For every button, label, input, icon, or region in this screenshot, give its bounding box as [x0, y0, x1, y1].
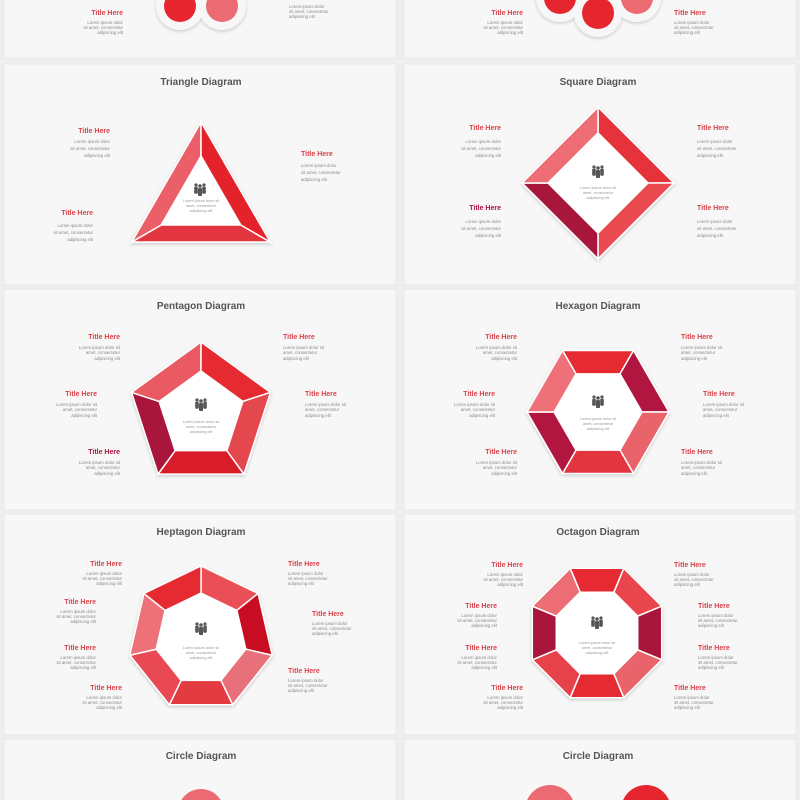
- text blocks: adipiscing elit: [681, 471, 708, 476]
- text blocks: amet, consectetur: [681, 465, 716, 470]
- panel: top-left partial: [4, 0, 396, 58]
- center text: adipiscing elit: [190, 209, 213, 213]
- center text: [580, 417, 617, 431]
- text: right bottom: Lorem ipsum dolor: [697, 219, 733, 224]
- text blocks: sit amet, consectetur: [674, 577, 714, 582]
- text: right: Lorem ipsum dolor: [674, 20, 710, 25]
- text blocks: adipiscing elit: [96, 705, 123, 710]
- text: right: Lorem ipsum dolor: [301, 163, 337, 168]
- text: left top: adipiscing elit: [84, 153, 111, 158]
- center text: [580, 186, 617, 200]
- text: left top: sit amet, consectetur: [70, 146, 111, 151]
- chart: pentagon ring: [132, 342, 270, 474]
- text blocks: amet, consectetur: [461, 407, 496, 412]
- text: left: [483, 10, 524, 35]
- text blocks: Lorem ipsum dolor sit: [56, 402, 98, 407]
- text blocks: adipiscing elit: [94, 356, 121, 361]
- text: right bottom: adipiscing elit: [697, 233, 724, 238]
- text blocks: adipiscing elit: [471, 623, 498, 628]
- text blocks: adipiscing elit: [681, 356, 708, 361]
- text blocks: Title Here: [88, 449, 120, 456]
- center text: amet, consectetur: [186, 204, 217, 208]
- text blocks: Lorem ipsum dolor sit: [681, 345, 723, 350]
- text: top-right body: adipiscing elit: [289, 14, 316, 19]
- text: right top: Title Here: [697, 125, 729, 132]
- text blocks: Lorem ipsum dolor: [698, 613, 734, 618]
- text blocks: Lorem ipsum dolor: [86, 695, 123, 700]
- text blocks: adipiscing elit: [469, 413, 496, 418]
- text: left: Lorem ipsum dolor: [487, 20, 524, 25]
- text blocks: adipiscing elit: [491, 356, 518, 361]
- heading: Circle Diagram: [166, 751, 236, 762]
- icon: people: [592, 395, 604, 408]
- text blocks: Title Here: [681, 334, 713, 341]
- text blocks: adipiscing elit: [70, 619, 97, 624]
- text blocks: adipiscing elit: [497, 582, 524, 587]
- text: left top: adipiscing elit: [475, 153, 502, 158]
- text blocks: Title Here: [674, 685, 706, 692]
- text blocks: Title Here: [90, 685, 122, 692]
- text: top-right body: sit amet, consectetur: [289, 9, 329, 14]
- text blocks: adipiscing elit: [491, 471, 518, 476]
- text blocks: Lorem ipsum dolor: [461, 613, 498, 618]
- text: right top: adipiscing elit: [697, 153, 724, 158]
- text: top-left title: Title Here: [91, 10, 123, 17]
- text blocks: adipiscing elit: [305, 413, 332, 418]
- center text: Lorem ipsum dolor sit: [183, 199, 220, 203]
- text: left top: Lorem ipsum dolor: [74, 139, 111, 144]
- icon: people: [195, 622, 207, 635]
- text blocks: sit amet, consectetur: [457, 618, 498, 623]
- center text: amet, consectetur: [583, 422, 614, 426]
- text blocks: Lorem ipsum dolor: [487, 572, 524, 577]
- text: left: adipiscing elit: [497, 30, 524, 35]
- text blocks: Title Here: [485, 449, 517, 456]
- text blocks: amet, consectetur: [483, 465, 518, 470]
- center text: amet, consectetur: [186, 425, 217, 429]
- text: top-left title: adipiscing elit: [97, 30, 124, 35]
- center text: amet, consectetur: [583, 191, 614, 195]
- panel: circle diagram left: [4, 739, 396, 800]
- text: left bottom: adipiscing elit: [67, 237, 94, 242]
- text blocks: Title Here: [674, 562, 706, 569]
- text: left top: Title Here: [469, 125, 501, 132]
- icon: people: [592, 165, 604, 178]
- text blocks: Lorem ipsum dolor: [288, 678, 324, 683]
- text: left top: [461, 125, 502, 158]
- heading: Circle Diagram: [563, 751, 633, 762]
- text: right top: [697, 125, 737, 158]
- icon: circle: [178, 789, 224, 800]
- heading: Triangle Diagram: [160, 77, 242, 88]
- chart: heptagon ring: [130, 566, 272, 705]
- text blocks: Title Here: [288, 668, 320, 675]
- panel: hexagon: [404, 289, 796, 510]
- text blocks: adipiscing elit: [288, 688, 315, 693]
- text blocks: sit amet, consectetur: [674, 700, 714, 705]
- center text: [183, 646, 220, 660]
- icon: people: [194, 183, 206, 196]
- chart: square ring: [522, 107, 674, 259]
- text: left top: sit amet, consectetur: [461, 146, 502, 151]
- text blocks: adipiscing elit: [497, 705, 524, 710]
- text blocks: Title Here: [463, 391, 495, 398]
- heading: Heptagon Diagram: [157, 527, 246, 538]
- text blocks: [56, 561, 352, 710]
- text blocks: Title Here: [88, 334, 120, 341]
- text blocks: adipiscing elit: [703, 413, 730, 418]
- heading: Octagon Diagram: [556, 527, 640, 538]
- text blocks: Lorem ipsum dolor sit: [454, 402, 496, 407]
- center text: Lorem ipsum dolor sit: [183, 646, 220, 650]
- text blocks: adipiscing elit: [471, 665, 498, 670]
- text blocks: adipiscing elit: [94, 471, 121, 476]
- text: top-right body: [289, 4, 329, 19]
- text blocks: Lorem ipsum dolor: [312, 621, 348, 626]
- text: left: Title Here: [491, 10, 523, 17]
- center text: [579, 641, 616, 655]
- text: left top: [70, 128, 111, 158]
- text: left bottom: Title Here: [469, 205, 501, 212]
- text blocks: Title Here: [681, 449, 713, 456]
- text blocks: Lorem ipsum dolor: [698, 655, 734, 660]
- text blocks: amet, consectetur: [681, 350, 716, 355]
- heading: Square Diagram: [560, 77, 636, 88]
- text blocks: Lorem ipsum dolor: [86, 571, 123, 576]
- text blocks: amet, consectetur: [703, 407, 738, 412]
- text: top-right body: Lorem ipsum dolor: [289, 4, 325, 9]
- center text: adipiscing elit: [587, 196, 610, 200]
- text blocks: Lorem ipsum dolor: [60, 609, 97, 614]
- text: left top: Title Here: [78, 128, 110, 135]
- text blocks: sit amet, consectetur: [288, 576, 328, 581]
- panel: octagon: [404, 514, 796, 735]
- text blocks: adipiscing elit: [70, 665, 97, 670]
- text blocks: sit amet, consectetur: [288, 683, 328, 688]
- text blocks: Title Here: [465, 645, 497, 652]
- text: right bottom: Title Here: [697, 205, 729, 212]
- text blocks: amet, consectetur: [63, 407, 98, 412]
- text: right bottom: [697, 205, 737, 238]
- heading: Hexagon Diagram: [555, 301, 641, 312]
- text blocks: Title Here: [65, 391, 97, 398]
- text: right top: sit amet, consectetur: [697, 146, 737, 151]
- text blocks: amet, consectetur: [305, 407, 340, 412]
- text: right: Title Here: [301, 151, 333, 158]
- text blocks: Lorem ipsum dolor sit: [79, 345, 121, 350]
- text blocks: Title Here: [698, 645, 730, 652]
- text blocks: adipiscing elit: [96, 581, 123, 586]
- panel: pentagon: [4, 289, 396, 510]
- text blocks: [454, 334, 745, 476]
- text: top-left title: Lorem ipsum dolor: [87, 20, 124, 25]
- icon: circles: [525, 785, 671, 800]
- text: right: sit amet, consectetur: [301, 170, 341, 175]
- center text: [183, 420, 220, 434]
- center text: adipiscing elit: [190, 430, 213, 434]
- text: right: adipiscing elit: [674, 30, 701, 35]
- text blocks: Title Here: [64, 599, 96, 606]
- text: left bottom: Title Here: [61, 210, 93, 217]
- text: right: Title Here: [674, 10, 706, 17]
- chart: hexagon ring: [527, 350, 669, 474]
- text blocks: Lorem ipsum dolor: [487, 695, 524, 700]
- text blocks: sit amet, consectetur: [483, 577, 524, 582]
- text blocks: amet, consectetur: [86, 350, 121, 355]
- text blocks: adipiscing elit: [283, 356, 310, 361]
- text: right: adipiscing elit: [301, 177, 328, 182]
- text blocks: adipiscing elit: [698, 665, 725, 670]
- text blocks: Lorem ipsum dolor sit: [79, 460, 121, 465]
- text blocks: amet, consectetur: [483, 350, 518, 355]
- panel: circle diagram right: [404, 739, 796, 800]
- text: right: [301, 151, 341, 182]
- panel: square: [404, 64, 796, 285]
- panel: top-right partial: [404, 0, 796, 58]
- text blocks: Title Here: [491, 685, 523, 692]
- text: left: sit amet, consectetur: [483, 25, 524, 30]
- center text: [183, 199, 220, 213]
- text blocks: [457, 562, 738, 710]
- icon: circle halo left: [156, 0, 246, 30]
- text blocks: sit amet, consectetur: [82, 576, 123, 581]
- text blocks: Title Here: [64, 645, 96, 652]
- text: left bottom: Lorem ipsum dolor: [465, 219, 502, 224]
- text blocks: Title Here: [698, 603, 730, 610]
- text: left top: Lorem ipsum dolor: [465, 139, 502, 144]
- text blocks: sit amet, consectetur: [56, 660, 97, 665]
- text blocks: sit amet, consectetur: [312, 626, 352, 631]
- text blocks: Lorem ipsum dolor sit: [305, 402, 347, 407]
- text blocks: Lorem ipsum dolor sit: [283, 345, 325, 350]
- text blocks: [56, 334, 347, 476]
- center text: amet, consectetur: [582, 646, 613, 650]
- text: left bottom: adipiscing elit: [475, 233, 502, 238]
- center text: Lorem ipsum dolor sit: [579, 641, 616, 645]
- heading: Pentagon Diagram: [157, 301, 245, 312]
- text blocks: sit amet, consectetur: [56, 614, 97, 619]
- text blocks: sit amet, consectetur: [698, 618, 738, 623]
- text blocks: Lorem ipsum dolor: [674, 572, 710, 577]
- text: top-left title: [83, 10, 124, 35]
- chart: triangle ring: [132, 122, 270, 251]
- icon: people: [195, 398, 207, 411]
- text: right bottom: sit amet, consectetur: [697, 226, 737, 231]
- text blocks: sit amet, consectetur: [698, 660, 738, 665]
- icon: circles: [536, 0, 661, 37]
- text: right: sit amet, consectetur: [674, 25, 714, 30]
- text blocks: Lorem ipsum dolor: [288, 571, 324, 576]
- text blocks: Lorem ipsum dolor sit: [681, 460, 723, 465]
- center text: adipiscing elit: [587, 427, 610, 431]
- text blocks: Title Here: [465, 603, 497, 610]
- center text: amet, consectetur: [186, 651, 217, 655]
- text blocks: Lorem ipsum dolor: [461, 655, 498, 660]
- text blocks: Title Here: [485, 334, 517, 341]
- center text: Lorem ipsum dolor sit: [183, 420, 220, 424]
- text blocks: Title Here: [305, 391, 337, 398]
- text blocks: Title Here: [703, 391, 735, 398]
- text: left bottom: sit amet, consectetur: [53, 230, 94, 235]
- text blocks: sit amet, consectetur: [82, 700, 123, 705]
- text blocks: Title Here: [283, 334, 315, 341]
- text blocks: adipiscing elit: [674, 582, 701, 587]
- text: top-left title: sit amet, consectetur: [83, 25, 124, 30]
- center text: adipiscing elit: [586, 651, 609, 655]
- text: left bottom: sit amet, consectetur: [461, 226, 502, 231]
- text blocks: adipiscing elit: [71, 413, 98, 418]
- center text: Lorem ipsum dolor sit: [580, 417, 617, 421]
- text blocks: Lorem ipsum dolor sit: [703, 402, 745, 407]
- text blocks: Lorem ipsum dolor: [60, 655, 97, 660]
- text: left bottom: Lorem ipsum dolor: [57, 223, 94, 228]
- text: left bottom: [461, 205, 502, 238]
- text blocks: amet, consectetur: [283, 350, 318, 355]
- text blocks: amet, consectetur: [86, 465, 121, 470]
- text: right top: Lorem ipsum dolor: [697, 139, 733, 144]
- text blocks: Lorem ipsum dolor sit: [476, 345, 518, 350]
- panel: triangle: [4, 64, 396, 285]
- text blocks: Lorem ipsum dolor sit: [476, 460, 518, 465]
- text blocks: adipiscing elit: [674, 705, 701, 710]
- text: right: [674, 10, 714, 35]
- text blocks: Title Here: [491, 562, 523, 569]
- text: left bottom: [53, 210, 94, 242]
- text blocks: sit amet, consectetur: [483, 700, 524, 705]
- icon: people: [591, 616, 603, 629]
- text blocks: adipiscing elit: [288, 581, 315, 586]
- text blocks: Title Here: [312, 611, 344, 618]
- panel: heptagon: [4, 514, 396, 735]
- text blocks: adipiscing elit: [312, 631, 339, 636]
- center text: adipiscing elit: [190, 656, 213, 660]
- text blocks: adipiscing elit: [698, 623, 725, 628]
- text blocks: Title Here: [90, 561, 122, 568]
- text blocks: Title Here: [288, 561, 320, 568]
- text blocks: sit amet, consectetur: [457, 660, 498, 665]
- text blocks: Lorem ipsum dolor: [674, 695, 710, 700]
- center text: Lorem ipsum dolor sit: [580, 186, 617, 190]
- chart: octagon ring: [532, 568, 662, 698]
